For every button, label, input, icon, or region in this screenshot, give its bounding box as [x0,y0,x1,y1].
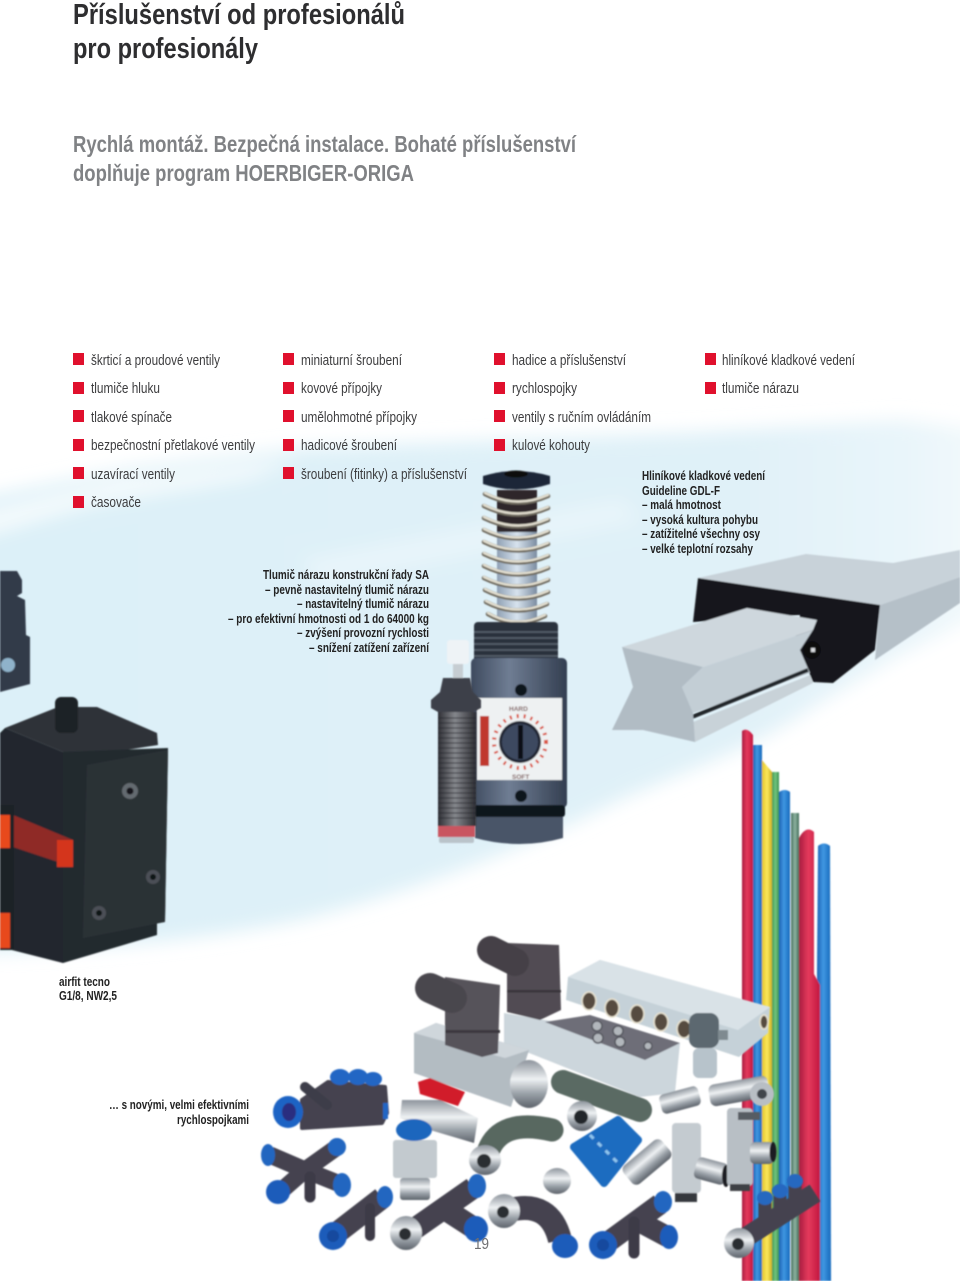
callout: shock absorber [228,568,429,655]
grey green tee [563,1082,640,1131]
caption: airfit tecno: G1/8, NW2,5 [59,989,117,1003]
image: shock absorber SA [471,470,567,844]
black manifold fitting [273,1069,388,1128]
black tee [589,1191,678,1259]
manifold [566,960,770,1057]
callout: shock absorber: – pro efektivní hmotnosti od 1 do 64000 kg [228,612,429,626]
product list column 2: umělohmotné přípojky [301,409,417,426]
image: aluminium guide rail GDL-F [612,550,960,742]
chrome hex fitting [393,1119,437,1200]
product list column 2: hadicové šroubení [301,437,398,454]
callout: shock absorber: Tlumič nárazu konstrukční řady SA [263,568,429,582]
black cross fitting [261,1138,351,1204]
red strip [13,815,73,867]
carriage side [875,577,960,660]
product list column 3: kulové kohouty [512,437,590,454]
title [73,0,405,65]
ball valve [400,1078,478,1143]
product list column 1 [73,352,255,511]
subtitle: doplňuje program HOERBIGER-ORIGA [73,160,414,186]
product list column 1: uzavírací ventily [91,466,175,483]
callout: guide rail: – velké teplotní rozsahy [642,542,753,556]
blue coupling [543,1120,638,1194]
chrome fittings [620,1075,774,1187]
product list column 2: miniaturní šroubení [301,352,403,369]
caption: new quick couplings: … s novými, velmi efektivními [109,1098,249,1112]
product list column 4: tlumiče nárazu [722,380,799,397]
callout: guide rail [642,469,765,556]
image: left edge valve [0,571,30,692]
page number: 19 [474,1236,489,1253]
carriage black end cap [693,578,880,683]
product list column 2 [283,352,468,483]
image: small shock absorber [431,640,481,843]
product list column 1: tlumiče hluku [91,380,160,397]
rail lower side [693,675,813,742]
product list column 4: hliníkové kladkové vedení [722,352,856,369]
black multi port fitting [724,1174,815,1258]
black tee with chrome end [390,1174,488,1250]
image: pneumatic fittings and accessories [261,943,815,1259]
cap [483,470,550,490]
product list column 3: hadice a příslušenství [512,352,627,369]
callout: guide rail: – vysoká kultura pohybu [642,513,758,527]
product list column 3: rychlospojky [512,380,577,397]
aluminium block [414,1023,548,1108]
threaded neck [474,622,558,664]
rail end face [612,647,703,742]
product list column 2: kovové přípojky [301,380,382,397]
spring and rod [484,490,548,623]
title: pro profesionály [73,33,258,65]
product list column 1: tlakové spínače [91,409,172,426]
caption: airfit tecno [59,975,117,1003]
product list column 1: časovače [91,494,141,511]
roller [803,641,821,659]
callout: shock absorber: – zvýšení provozní rychlosti [297,626,429,640]
product list column 2: šroubení (fitinky) a příslušenství [301,466,468,483]
subtitle: Rychlá montáž. Bezpečná instalace. Bohaté příslušenství [73,131,577,157]
callout: shock absorber: – pevně nastavitelný tlumič nárazu [265,583,429,597]
callout: guide rail: Hliníkové kladkové vedení [642,469,765,483]
carriage top [698,550,960,605]
body with dial label: SOFT [512,774,529,781]
rail side [682,630,813,713]
left edge stack [0,805,14,950]
callout: shock absorber: – nastavitelný tlumič nárazu [297,597,429,611]
product list column 3 [494,352,651,454]
chrome swivel fitting right [727,1108,776,1191]
grey green elbow [469,1127,552,1175]
caption: new quick couplings [109,1098,249,1127]
image: coloured pneumatic tubes [742,730,831,1281]
background: pale blue wash [0,420,960,952]
body with dial label [471,658,567,808]
stem [55,697,78,733]
black Y fitting [319,1186,393,1250]
caption: new quick couplings: rychlospojkami [177,1113,249,1127]
callout: guide rail: – zatížitelné všechny osy [642,527,760,541]
base rings [473,805,565,844]
callout: guide rail: – malá hmotnost [642,498,722,512]
image: black valve block [0,697,168,963]
body with dial label: HARD [509,706,528,713]
filter silencer [689,1013,728,1078]
aluminium plate [504,1013,680,1097]
callout: guide rail: Guideline GDL-F [642,484,720,498]
callout: shock absorber: – snížení zatížení zařízení [309,641,429,655]
electrical connector upper [491,943,561,1020]
screws [122,783,138,799]
subtitle [73,131,577,186]
black elbow [488,1194,578,1258]
product list column 1: škrticí a proudové ventily [91,352,220,369]
product list column 1: bezpečnostní přetlakové ventily [91,437,255,454]
caption: airfit tecno: airfit tecno [59,975,110,989]
block faces [0,728,70,963]
product list column 4 [705,352,856,397]
rail slot [692,670,808,717]
chrome swivel fitting [672,1123,730,1202]
electrical connector lower [430,977,500,1057]
product list column 3: ventily s ručním ovládáním [512,409,651,426]
rail top [622,608,817,667]
